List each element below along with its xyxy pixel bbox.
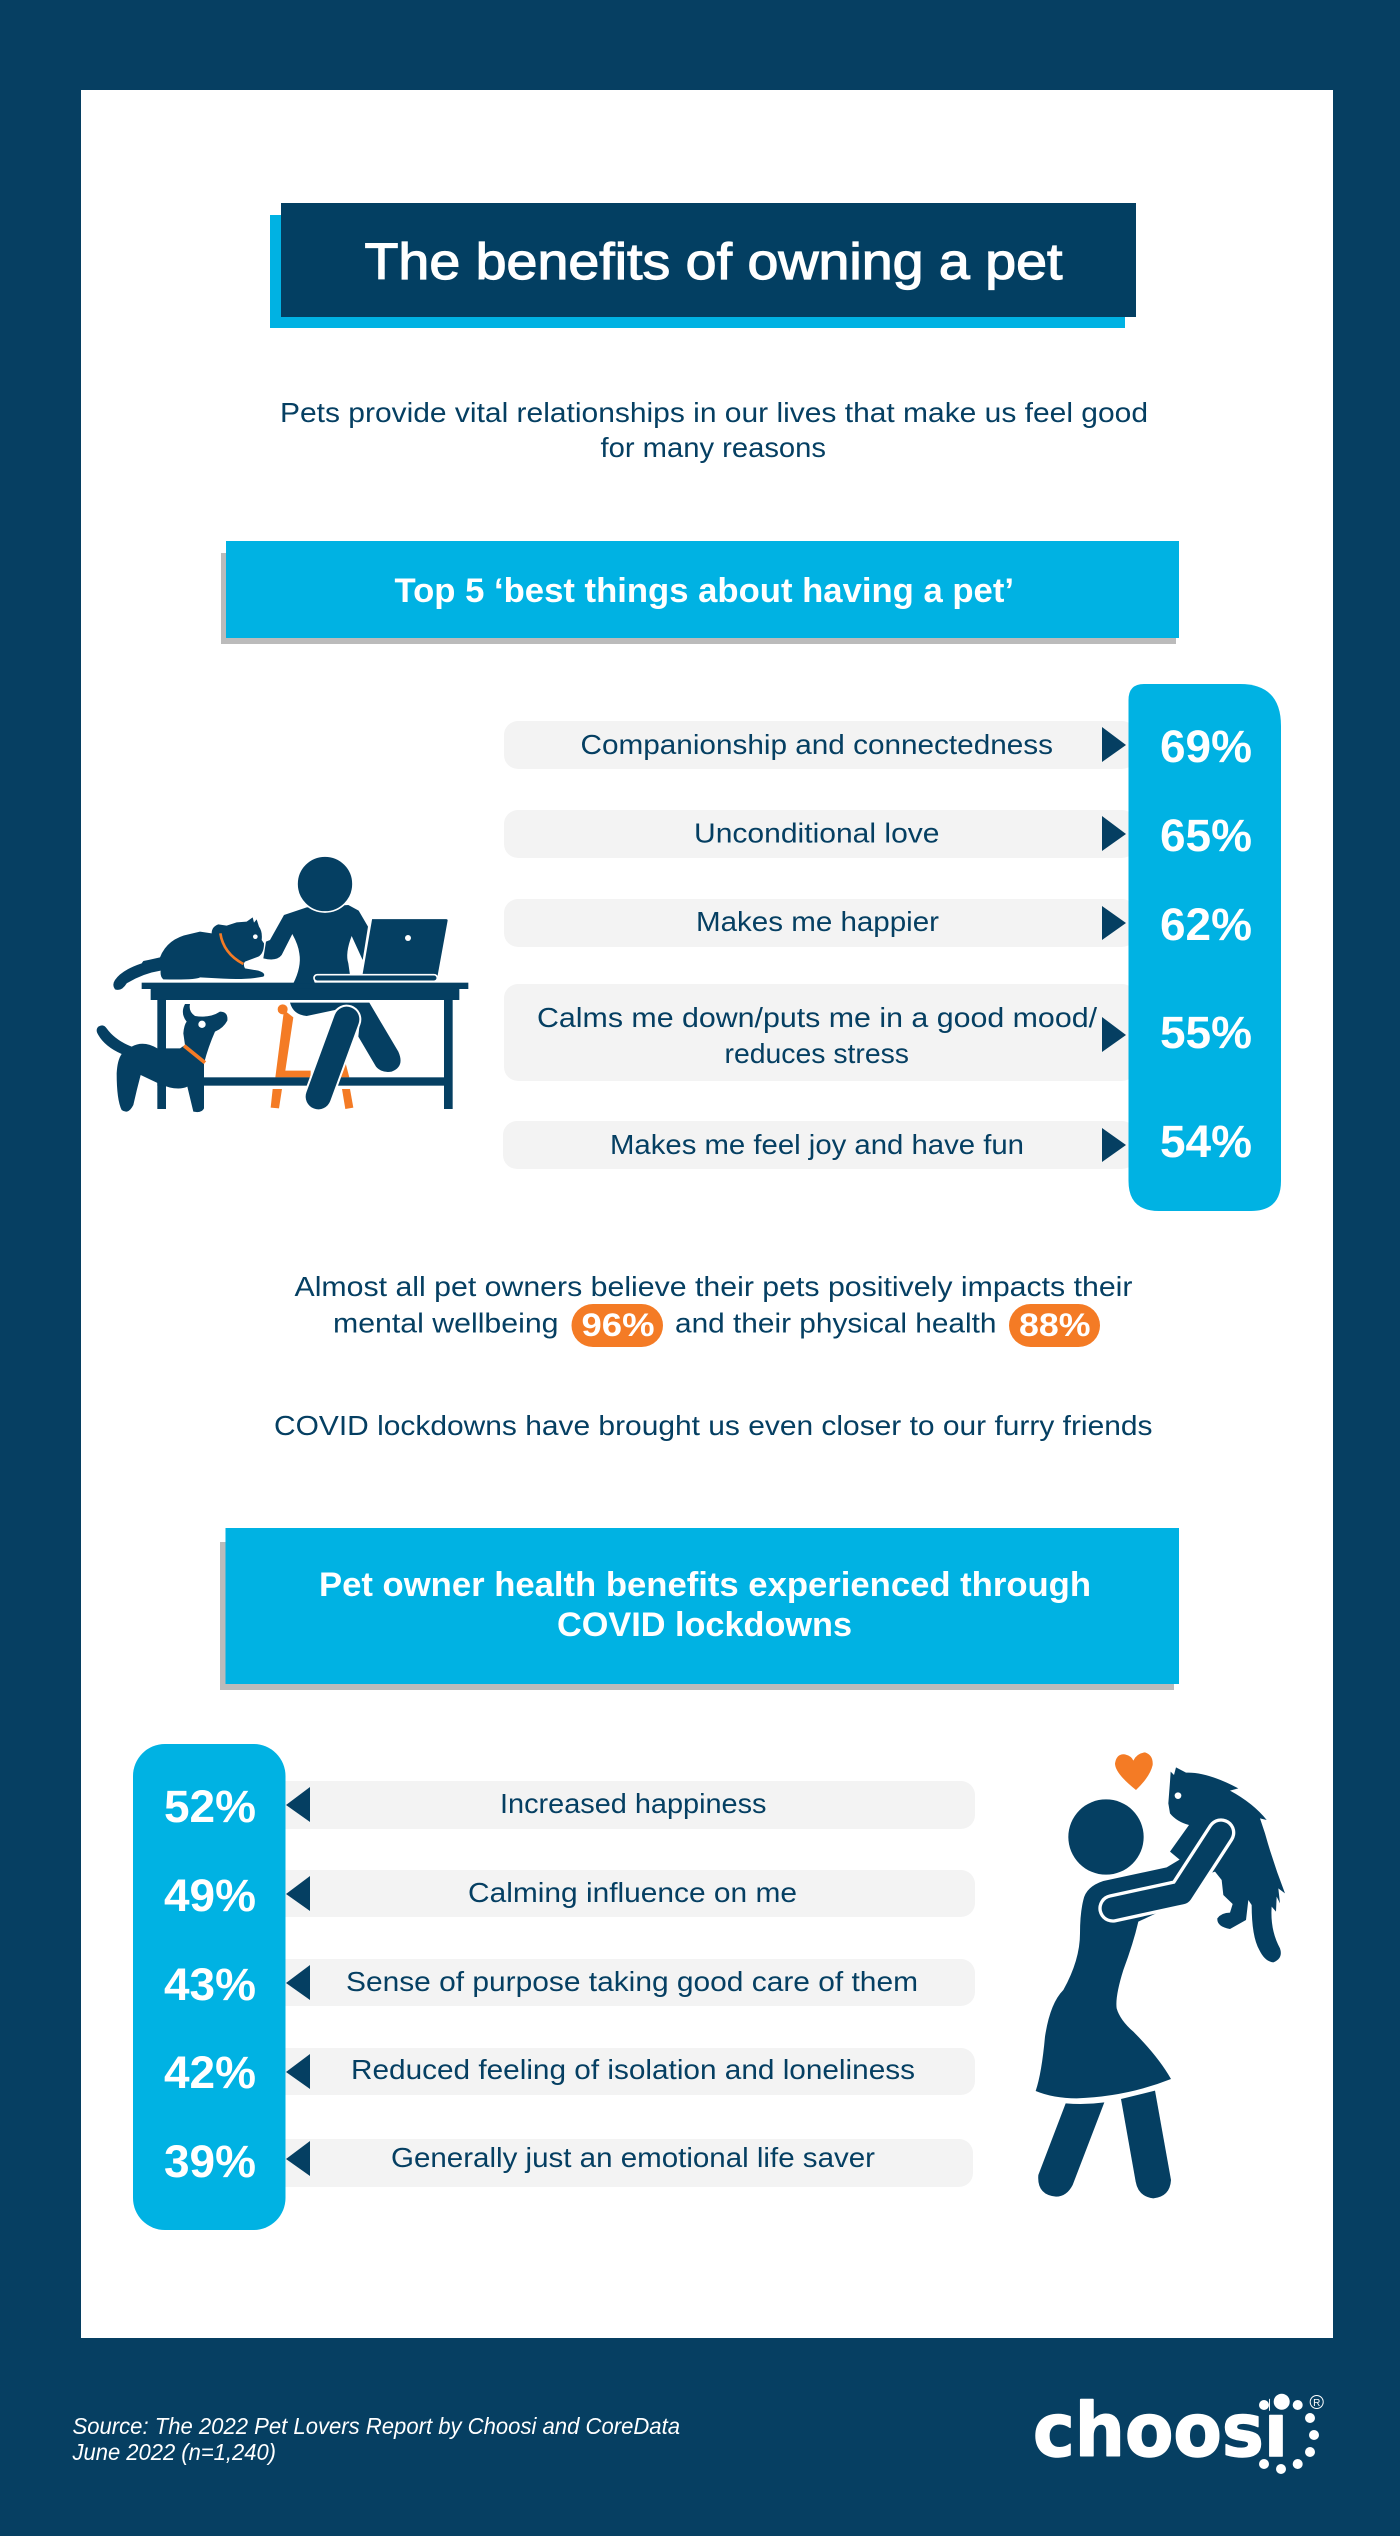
intro text: Pets provide vital relationships in our lives that make us feel good [280, 397, 1148, 428]
text block: covid statement: COVID lockdowns have brought us even closer to our furry friends [274, 1410, 1152, 1441]
percentage column: covid benefits: 42% [164, 2047, 256, 2098]
icon: person [263, 856, 401, 1097]
text block: wellbeing statement: mental wellbeing [333, 1308, 558, 1338]
row: calms me down: Calms me down/puts me in a good mood/ [537, 1002, 1097, 1033]
icon: orange chair [271, 1004, 353, 1109]
icon: lifted cat [1168, 1767, 1285, 1962]
percentage column: top 5: 62% [1160, 899, 1252, 950]
row: happier: Makes me happier [696, 906, 939, 937]
row: sense of purpose [271, 1959, 975, 2006]
icon: heart [1115, 1752, 1153, 1790]
icon: laptop [314, 919, 448, 981]
icon: cat on desk [113, 917, 264, 990]
text block: wellbeing statement: Almost all pet owners believe their pets positively impacts their [294, 1271, 1132, 1302]
heading: covid health benefits: COVID lockdowns [557, 1606, 852, 1644]
row: companionship: Companionship and connectedness [580, 729, 1053, 760]
heading: covid health benefits [220, 1528, 1179, 1690]
title [270, 203, 1136, 328]
callout: 96%: 96% [582, 1307, 654, 1343]
row: increased happiness [271, 1781, 975, 1829]
percentage column: top 5 [1128, 684, 1281, 1211]
heading: top 5 best things [221, 541, 1179, 644]
logo: choosi: choosi [1033, 2388, 1288, 2474]
row: companionship [504, 721, 1136, 769]
row: calming influence [271, 1870, 975, 1917]
percentage column: top 5: 54% [1160, 1116, 1252, 1167]
callout: 96% [572, 1304, 663, 1347]
row: happier [504, 899, 1136, 947]
intro text: for many reasons [600, 432, 826, 463]
source note: June 2022 (n=1,240) [72, 2439, 276, 2465]
intro text [280, 397, 1148, 463]
icon: dog [97, 1004, 227, 1112]
row: sense of purpose: Sense of purpose taking good care of them [346, 1966, 918, 1997]
percentage column: covid benefits: 49% [164, 1870, 256, 1921]
source note [72, 2413, 680, 2465]
callout: 88% [1009, 1304, 1100, 1347]
heading: covid health benefits: Pet owner health benefits experienced through [319, 1566, 1091, 1604]
panel: covid benefits list [133, 1744, 975, 2230]
panel: top 5 list [503, 684, 1281, 1211]
row: emotional life saver [271, 2139, 973, 2187]
row: joy and fun [503, 1121, 1136, 1169]
percentage column: top 5: 69% [1160, 721, 1252, 772]
illustration: woman lifting cat with heart [1036, 1752, 1285, 2198]
callout: 88%: 88% [1019, 1307, 1090, 1343]
percentage column: covid benefits [133, 1744, 286, 2230]
icon: woman [1036, 1799, 1221, 2198]
icon: desk [142, 983, 468, 1109]
row: unconditional love: Unconditional love [694, 818, 940, 848]
percentage column: covid benefits: 39% [164, 2136, 256, 2187]
row: unconditional love [504, 810, 1136, 858]
logo: choosi: R [1313, 2398, 1320, 2409]
text block: wellbeing statement: and their physical health [675, 1308, 996, 1338]
row: joy and fun: Makes me feel joy and have fun [610, 1129, 1024, 1160]
percentage column: top 5: 55% [1160, 1007, 1252, 1058]
row: calming influence: Calming influence on me [468, 1877, 797, 1908]
row: reduced isolation [271, 2048, 975, 2095]
heading: top 5 best things: Top 5 ‘best things about having a pet’ [394, 572, 1014, 610]
row: increased happiness: Increased happiness [500, 1788, 766, 1819]
text block: wellbeing statement [294, 1271, 1132, 1347]
percentage column: top 5: 65% [1160, 810, 1252, 861]
row: reduced isolation: Reduced feeling of isolation and loneliness [351, 2054, 915, 2085]
row: emotional life saver: Generally just an emotional life saver [391, 2142, 875, 2173]
illustration: person at desk with cat and dog [97, 856, 468, 1112]
percentage column: covid benefits: 43% [164, 1959, 256, 2010]
percentage column: covid benefits: 52% [164, 1781, 256, 1832]
row: calms me down [504, 984, 1136, 1081]
title: The benefits of owning a pet [364, 233, 1062, 290]
row: calms me down: reduces stress [724, 1038, 909, 1069]
source note: Source: The 2022 Pet Lovers Report by Choosi and CoreData [72, 2413, 680, 2439]
